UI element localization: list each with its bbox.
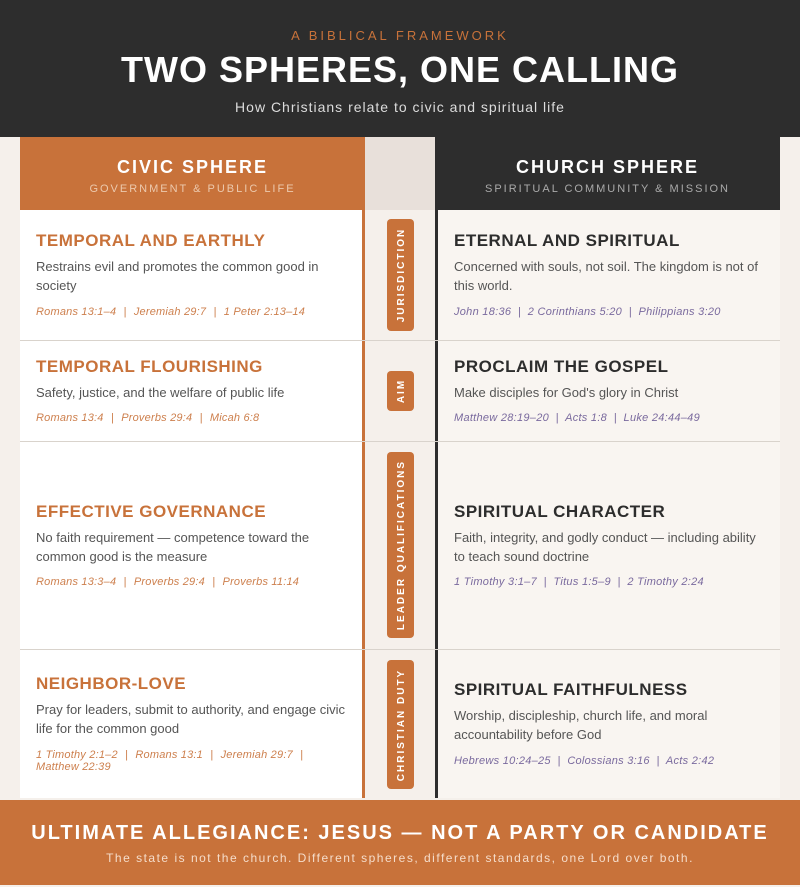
description: Safety, justice, and the welfare of public life [36, 385, 284, 400]
references: John 18:36 | 2 Corinthians 5:20 | Philippians 3:20 [454, 306, 721, 318]
description: accountability before God [454, 727, 601, 742]
footer subheading: The state is not the church. Different spheres, different standards, one Lord over both. [106, 851, 694, 865]
label: jurisdiction: JURISDICTION [396, 228, 406, 322]
description [36, 259, 319, 293]
heading: NEIGHBOR-LOVE [36, 674, 186, 693]
description: Pray for leaders, submit to authority, and engage civic [36, 702, 345, 717]
footer heading: ULTIMATE ALLEGIANCE: JESUS — NOT A PARTY OR CANDIDATE [31, 822, 769, 844]
description [454, 708, 707, 742]
heading: SPIRITUAL CHARACTER [454, 502, 665, 521]
row 2 civic [36, 357, 284, 424]
heading: ETERNAL AND SPIRITUAL [454, 231, 680, 250]
label: christian duty: CHRISTIAN DUTY [396, 668, 406, 781]
description: common good is the measure [36, 549, 207, 564]
label: christian duty [387, 660, 414, 789]
subtitle: How Christians relate to civic and spiritual life [235, 99, 565, 115]
references: Romans 13:3–4 | Proverbs 29:4 | Proverbs 11:14 [36, 576, 299, 588]
heading: PROCLAIM THE GOSPEL [454, 357, 668, 376]
label: leader qualifications: LEADER QUALIFICATIONS [396, 460, 406, 630]
civic subheading: GOVERNMENT & PUBLIC LIFE [89, 183, 296, 195]
heading: TEMPORAL FLOURISHING [36, 357, 263, 376]
references: Matthew 28:19–20 | Acts 1:8 | Luke 24:44–49 [454, 412, 700, 424]
description: Concerned with souls, not soil. The kingdom is not of [454, 259, 758, 274]
description: Faith, integrity, and godly conduct — including ability [454, 530, 756, 545]
references: 1 Timothy 2:1–2 | Romans 13:1 | Jeremiah 29:7 | Matthew 22:39 [36, 749, 303, 773]
description: to teach sound doctrine [454, 549, 589, 564]
references: Hebrews 10:24–25 | Colossians 3:16 | Acts 2:42 [454, 755, 714, 767]
description: Make disciples for God's glory in Christ [454, 385, 678, 400]
description: life for the common good [36, 721, 179, 736]
references: 1 Timothy 3:1–7 | Titus 1:5–9 | 2 Timothy 2:24 [454, 576, 704, 588]
description: No faith requirement — competence toward the [36, 530, 309, 545]
title: TWO SPHERES, ONE CALLING [121, 49, 679, 90]
row 2 church [454, 357, 700, 424]
footer banner [0, 800, 800, 885]
description [36, 702, 345, 736]
label: leader qualifications [387, 452, 414, 638]
description [36, 530, 309, 564]
row 1 church [454, 231, 758, 318]
row 3 civic [36, 502, 309, 588]
center column header [365, 137, 435, 210]
panel: civic sphere column header [20, 137, 365, 210]
description: society [36, 278, 76, 293]
label: aim [387, 371, 414, 411]
church subheading: SPIRITUAL COMMUNITY & MISSION [485, 183, 730, 195]
label: jurisdiction [387, 219, 414, 331]
panel: church sphere column header [435, 137, 780, 210]
description [454, 259, 758, 293]
row 4 civic [36, 674, 345, 773]
row 3 church [454, 502, 756, 588]
description: Worship, discipleship, church life, and moral [454, 708, 707, 723]
description: this world. [454, 278, 513, 293]
header banner [0, 0, 800, 137]
church heading: CHURCH SPHERE [516, 157, 699, 177]
row 4 church [454, 680, 714, 767]
references: Romans 13:4 | Proverbs 29:4 | Micah 6:8 [36, 412, 259, 424]
civic heading: CIVIC SPHERE [117, 157, 268, 177]
column backgrounds [20, 210, 362, 798]
description [454, 530, 756, 564]
heading: SPIRITUAL FAITHFULNESS [454, 680, 688, 699]
row 1 civic [36, 231, 319, 318]
label: aim: AIM [396, 379, 406, 403]
eyebrow: A BIBLICAL FRAMEWORK [291, 28, 509, 43]
description: Restrains evil and promotes the common good in [36, 259, 319, 274]
references: Romans 13:1–4 | Jeremiah 29:7 | 1 Peter 2:13–14 [36, 306, 305, 318]
heading: EFFECTIVE GOVERNANCE [36, 502, 266, 521]
heading: TEMPORAL AND EARTHLY [36, 231, 265, 250]
